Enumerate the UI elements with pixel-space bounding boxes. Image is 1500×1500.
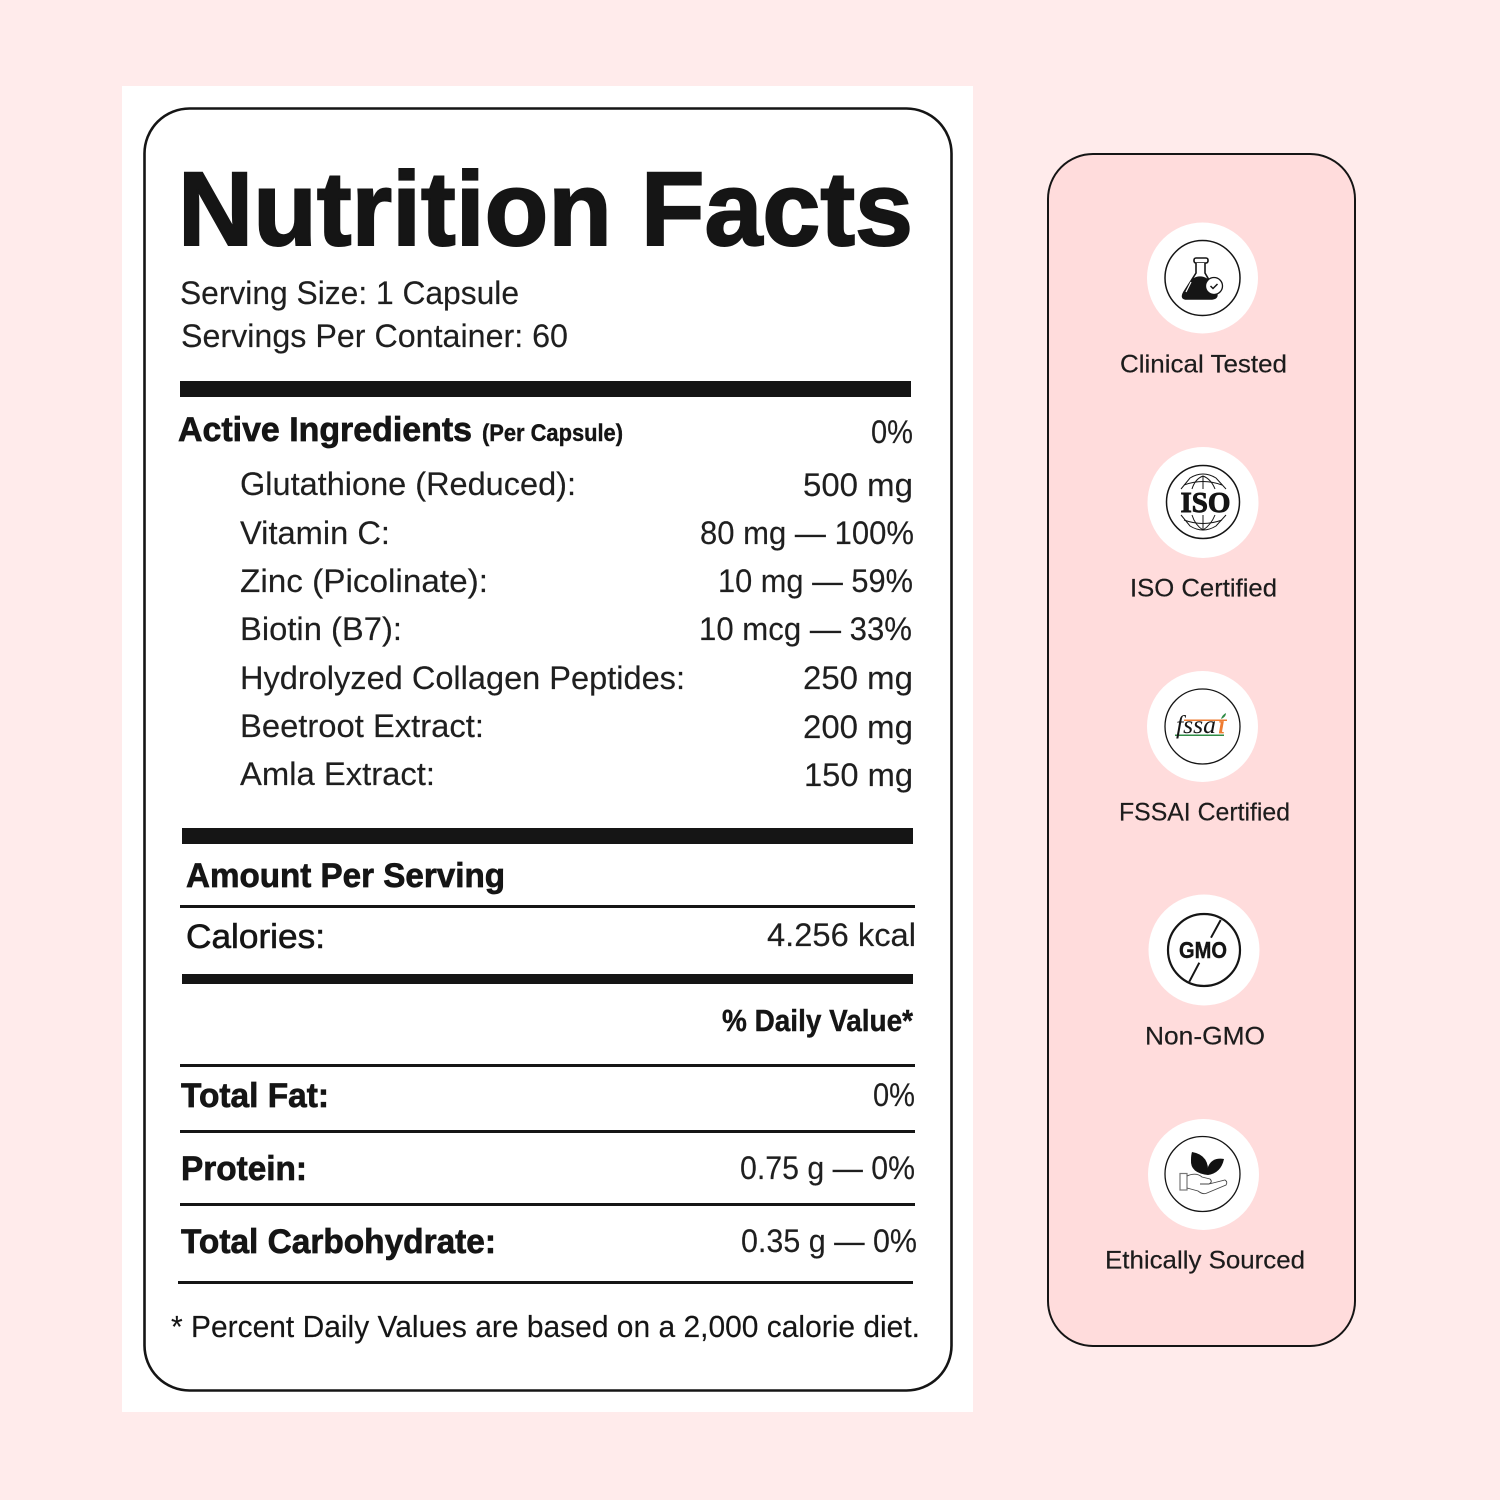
section: active ingredients: Glutathione (Reduced): <box>240 466 576 502</box>
footnote: * Percent Daily Values are based on a 2,000 calorie diet. <box>171 1310 920 1344</box>
icon: hand with leaves <box>1180 1152 1227 1194</box>
panel: certifications <box>1048 154 1355 1346</box>
section: active ingredients: Beetroot Extract: <box>240 708 484 744</box>
section: active ingredients: Vitamin C: <box>240 515 390 551</box>
section: active ingredients: 250 mg <box>803 660 913 696</box>
section: active ingredients: 10 mg — 59% <box>718 563 913 599</box>
icon: fssai logo: fssa <box>1176 712 1216 739</box>
section: daily value: Protein: <box>181 1150 307 1188</box>
label: Clinical Tested <box>1120 350 1287 378</box>
section: active ingredients: 80 mg — 100% <box>700 515 914 551</box>
serving information: Serving Size: 1 Capsule <box>180 275 519 311</box>
badge: clinical tested <box>1120 222 1287 378</box>
section: active ingredients: Biotin (B7): <box>240 611 402 647</box>
section: active ingredients: Hydrolyzed Collagen Peptides: <box>240 660 685 696</box>
section: active ingredients <box>178 411 914 793</box>
icon: crossed gmo <box>1179 920 1227 982</box>
badge: iso certified <box>1130 447 1277 602</box>
panel: nutrition facts label <box>122 86 973 1412</box>
section: amount per serving <box>180 857 916 956</box>
badge: fssai certified <box>1119 671 1290 826</box>
section: daily value <box>178 1004 917 1284</box>
section: amount per serving: Amount Per Serving <box>186 857 505 895</box>
section: active ingredients: 150 mg <box>804 757 913 793</box>
section: daily value: Total Carbohydrate: <box>181 1223 496 1261</box>
badge: ethically sourced <box>1105 1119 1305 1274</box>
icon: flask with check <box>1183 258 1222 299</box>
section: active ingredients: 0% <box>871 414 913 450</box>
section: active ingredients: 500 mg <box>803 467 913 503</box>
section: active ingredients: 200 mg <box>803 709 913 745</box>
label: Ethically Sourced <box>1105 1246 1305 1274</box>
section: daily value: % Daily Value* <box>722 1004 913 1038</box>
serving information: Servings Per Container: 60 <box>181 318 568 354</box>
label: FSSAI Certified <box>1119 798 1290 826</box>
section: active ingredients: Amla Extract: <box>240 756 435 792</box>
badge: non-gmo <box>1145 894 1265 1050</box>
section: daily value: 0% <box>873 1077 915 1113</box>
section: active ingredients: Zinc (Picolinate): <box>240 563 488 599</box>
serving information <box>180 275 568 354</box>
section: daily value: 0.75 g — 0% <box>740 1150 915 1186</box>
section: daily value: Total Fat: <box>181 1077 329 1115</box>
icon: iso globe <box>1180 474 1230 530</box>
icon: iso globe: ISO <box>1180 488 1230 519</box>
label: ISO Certified <box>1130 574 1277 602</box>
label: Non-GMO <box>1145 1022 1265 1050</box>
section: active ingredients: 10 mcg — 33% <box>699 611 912 647</box>
section: active ingredients: Active Ingredients <box>178 411 472 449</box>
section: amount per serving: Calories: <box>186 918 325 956</box>
icon: crossed gmo: GMO <box>1179 937 1227 963</box>
icon: fssai logo: ı <box>1218 712 1225 739</box>
section: active ingredients: (Per Capsule) <box>482 420 623 447</box>
section: daily value: 0.35 g — 0% <box>741 1223 917 1259</box>
title: Nutrition Facts <box>178 151 913 268</box>
section: amount per serving: 4.256 kcal <box>767 917 916 953</box>
